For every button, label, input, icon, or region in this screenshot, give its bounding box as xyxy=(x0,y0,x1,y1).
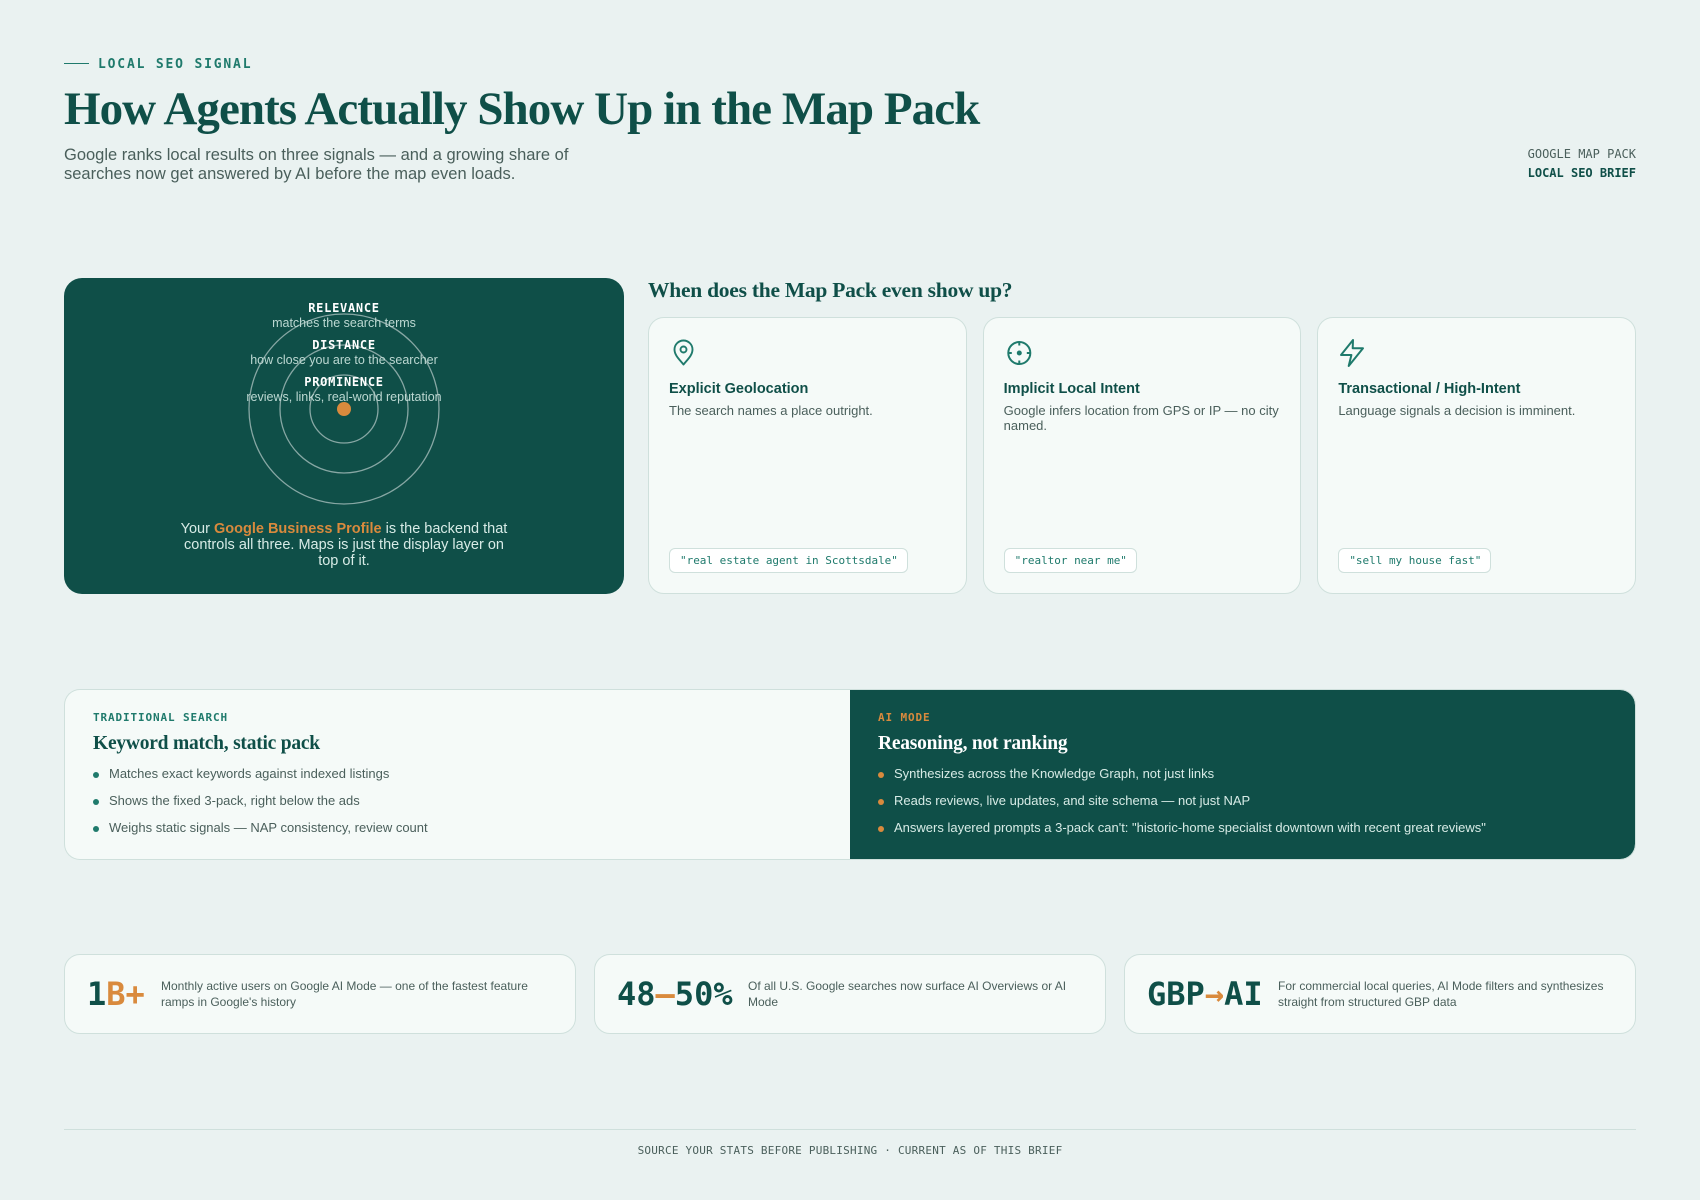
panel: traditional search xyxy=(64,689,850,860)
card title: Transactional / High-Intent xyxy=(1338,381,1520,397)
icon: map pin xyxy=(674,340,694,366)
label: distance: DISTANCE xyxy=(312,338,376,352)
stat: gbp to ai xyxy=(1124,954,1636,1034)
label: AI MODE xyxy=(878,711,931,724)
label: distance xyxy=(250,338,438,367)
footer: SOURCE YOUR STATS BEFORE PUBLISHING · CURRENT AS OF THIS BRIEF xyxy=(638,1144,1062,1157)
stat number: 1B+ xyxy=(87,975,145,1013)
query chip xyxy=(1338,548,1491,573)
query chip: "real estate agent in Scottsdale" xyxy=(680,554,898,567)
card title: Explicit Geolocation xyxy=(669,381,808,397)
label: relevance xyxy=(272,301,416,330)
label: relevance: matches the search terms xyxy=(272,316,416,330)
brief tag xyxy=(1528,147,1636,180)
card text: Language signals a decision is imminent. xyxy=(1338,403,1575,418)
icon: crosshair xyxy=(1007,341,1032,365)
stat: monthly users xyxy=(64,954,576,1034)
card: transactional xyxy=(1317,317,1636,594)
stat: search share xyxy=(594,954,1106,1034)
card: explicit geolocation xyxy=(648,317,967,594)
card text: Google infers location from GPS or IP — no city named. xyxy=(1004,403,1279,433)
label: prominence xyxy=(246,375,442,404)
chart: concentric signal rings xyxy=(248,313,440,505)
list item: Matches exact keywords against indexed listings xyxy=(109,766,389,781)
card text: The search names a place outright. xyxy=(669,403,873,418)
panel: three signals xyxy=(64,278,624,594)
list item: Synthesizes across the Knowledge Graph, not just links xyxy=(894,766,1214,781)
icon: lightning bolt xyxy=(1340,339,1364,367)
heading: Reasoning, not ranking xyxy=(878,733,1067,754)
stat number: GBP→AI xyxy=(1147,975,1263,1013)
stat text: For commercial local queries, AI Mode filters and synthesizes straight from structured GBP data xyxy=(1278,979,1603,1009)
label: distance: how close you are to the searcher xyxy=(250,353,438,367)
panel: ai mode xyxy=(850,689,1636,860)
list item: Weighs static signals — NAP consistency, review count xyxy=(109,820,428,834)
list item: Reads reviews, live updates, and site schema — not just NAP xyxy=(894,793,1250,808)
list item: Shows the fixed 3-pack, right below the ads xyxy=(109,793,360,808)
stat text: Of all U.S. Google searches now surface AI Overviews or AI Mode xyxy=(748,979,1066,1009)
header xyxy=(64,57,1636,182)
card: implicit local intent xyxy=(983,317,1301,594)
stat number: 48–50% xyxy=(617,975,733,1013)
card title: Implicit Local Intent xyxy=(1004,381,1140,397)
title: How Agents Actually Show Up in the Map Pack xyxy=(64,83,979,135)
label: prominence: reviews, links, real-world reputation xyxy=(246,390,442,404)
footer xyxy=(64,1129,1636,1159)
query chip xyxy=(669,548,908,573)
heading: Keyword match, static pack xyxy=(93,733,320,754)
eyebrow: LOCAL SEO SIGNAL xyxy=(98,57,252,72)
caption: Your Google Business Profile is the backend that controls all three. Maps is just the display layer on top of it. xyxy=(181,521,507,569)
brief tag: LOCAL SEO BRIEF xyxy=(1528,166,1636,180)
query chip: "sell my house fast" xyxy=(1349,554,1481,567)
label: TRADITIONAL SEARCH xyxy=(93,711,228,724)
stat text: Monthly active users on Google AI Mode — one of the fastest feature ramps in Google's history xyxy=(161,979,528,1009)
label: prominence: PROMINENCE xyxy=(304,375,384,389)
query chip: "realtor near me" xyxy=(1015,554,1127,567)
heading: when does the map pack show up: When does the Map Pack even show up? xyxy=(648,278,1012,302)
list item: Answers layered prompts a 3-pack can't: "historic-home specialist downtown with recent great reviews" xyxy=(894,820,1486,834)
brief tag: GOOGLE MAP PACK xyxy=(1528,147,1636,161)
label: relevance: RELEVANCE xyxy=(308,301,380,315)
query chip xyxy=(1004,548,1137,573)
subtitle: Google ranks local results on three signals — and a growing share of searches now get answered by AI before the map even loads. xyxy=(64,146,568,182)
